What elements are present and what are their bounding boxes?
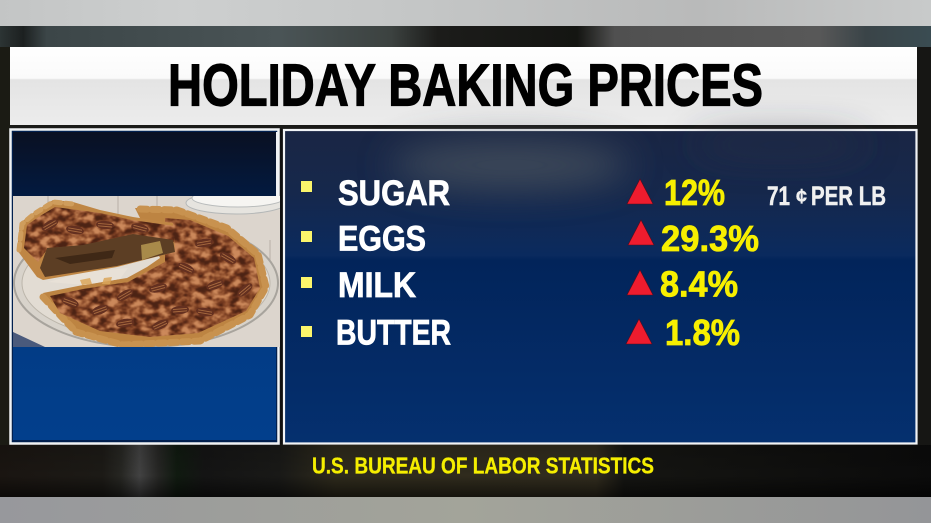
glass dish (13, 242, 279, 347)
panel: price list (284, 130, 916, 444)
title: HOLIDAY BAKING PRICES (168, 52, 763, 118)
photo: pecan pie (13, 189, 286, 347)
source line: U.S. BUREAU OF LABOR STATISTICS (312, 452, 654, 478)
row: eggs: 29.3% (661, 218, 759, 259)
row: milk (301, 264, 738, 305)
gap under slice (84, 279, 120, 285)
row: sugar: SUGAR (338, 173, 450, 213)
row: sugar (301, 172, 886, 213)
row: milk: 8.4% (660, 264, 738, 304)
row: milk: MILK (338, 265, 416, 305)
pie crust (43, 208, 268, 347)
panel: pie photo (10, 130, 286, 444)
note: price per pound: 71 (767, 181, 790, 211)
row: butter (301, 312, 740, 353)
note: price per pound: ¢ (796, 186, 807, 208)
plates (186, 196, 280, 214)
row: sugar: 12% (664, 172, 725, 213)
lifted slice (17, 200, 175, 280)
note: price per pound: PER LB (811, 181, 886, 211)
row: eggs (301, 218, 759, 259)
row: butter: BUTTER (336, 312, 451, 352)
slice cross-section (40, 234, 175, 277)
title banner (10, 47, 917, 125)
note: price per pound (767, 181, 886, 211)
row: butter: 1.8% (665, 312, 740, 353)
row: eggs: EGGS (338, 218, 426, 258)
bottom gray band (0, 497, 931, 523)
top gray band (0, 0, 931, 26)
pie filling (50, 218, 260, 337)
